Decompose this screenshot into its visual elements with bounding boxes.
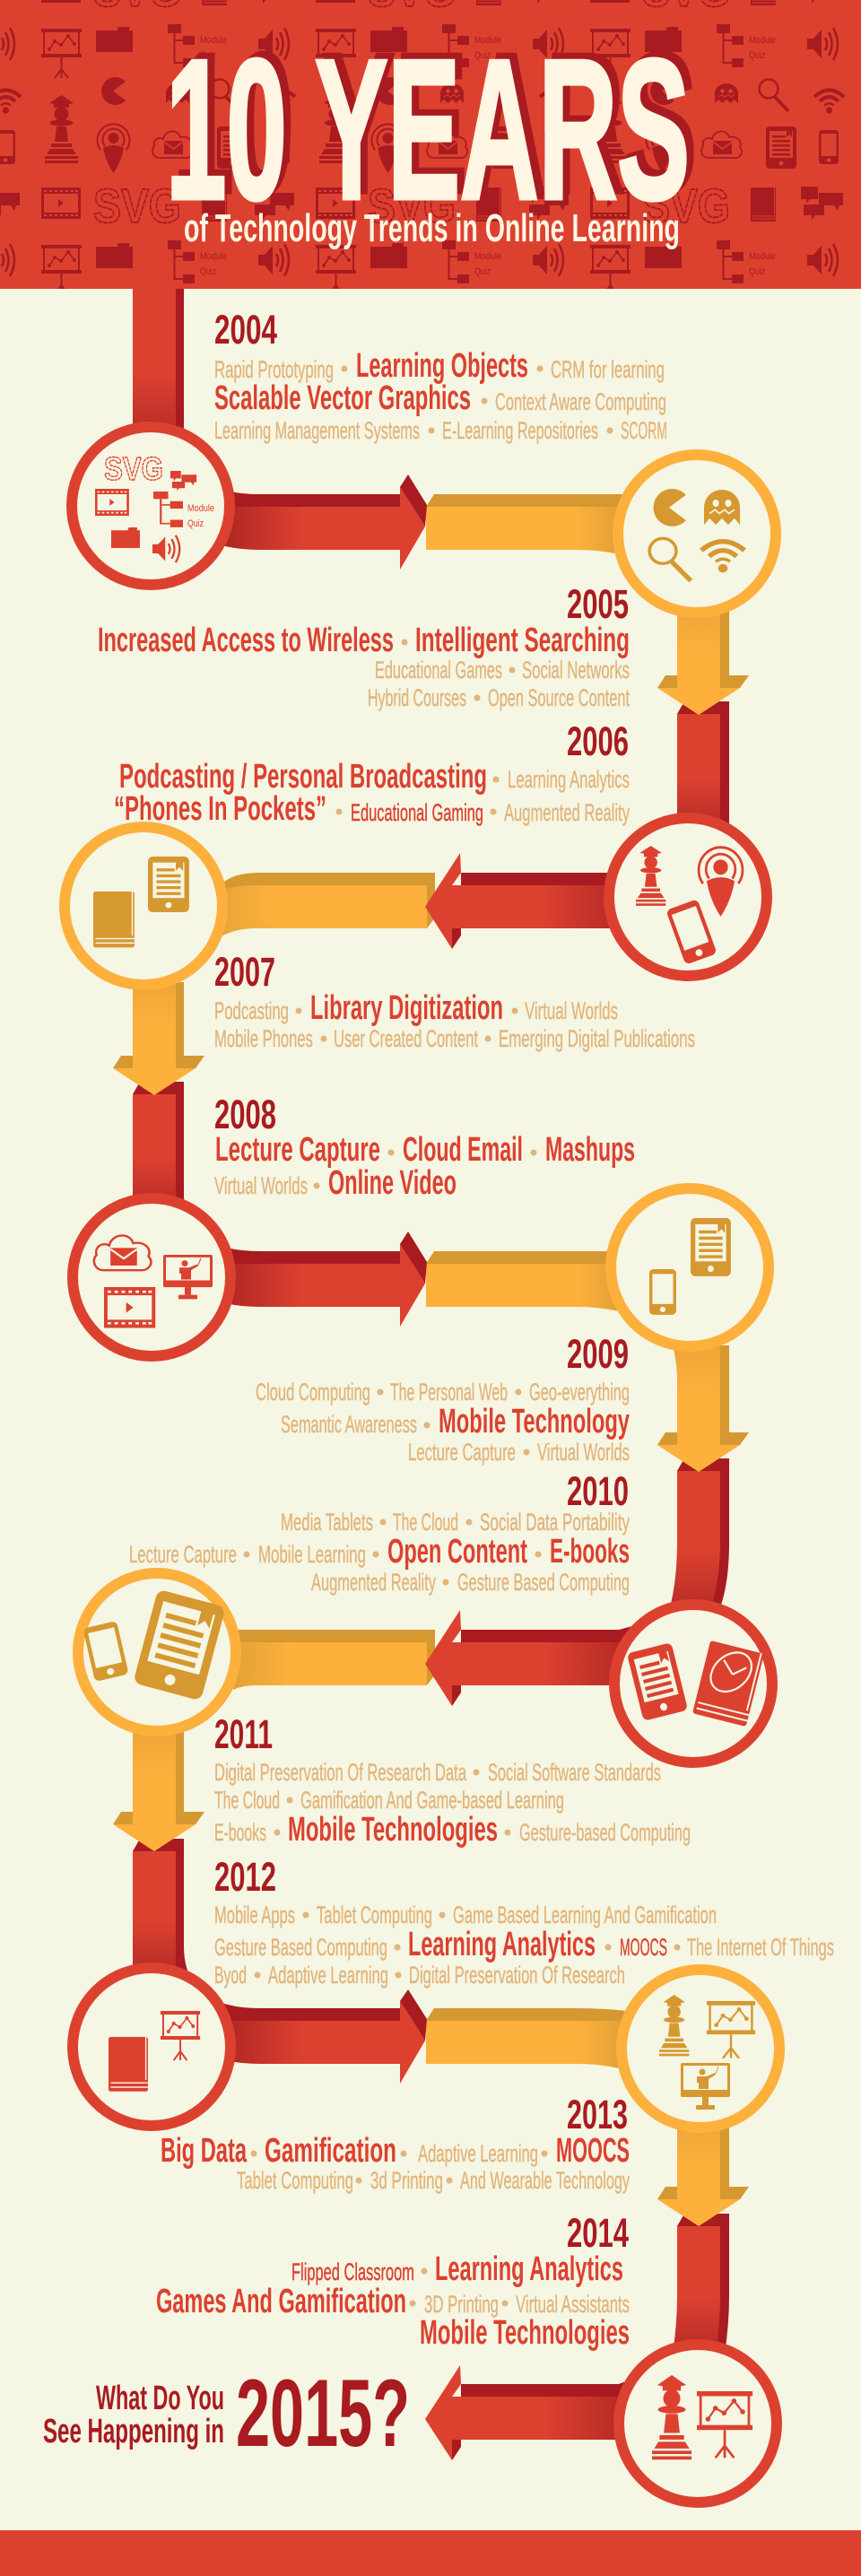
text block: 2013: Adaptive Learning — [418, 2140, 538, 2167]
text block: 2012: Learning Analytics — [408, 1926, 596, 1963]
text block: 2005: Open Source Content — [488, 684, 630, 711]
text block: 2009 — [256, 1331, 630, 1466]
circle 2008: cloud email, lecture monitor, film icons — [73, 1198, 230, 1356]
stem arrow: yellow 2005 to 2006 — [657, 610, 749, 715]
text block: 2004: E-Learning Repositories — [442, 417, 598, 444]
stem: red 2009 to 2010 — [668, 1458, 729, 1614]
icon pattern: Module — [749, 251, 776, 262]
icon pattern: Quiz — [474, 50, 491, 61]
icon pattern — [0, 0, 844, 438]
text block: 2010: Mobile Learning — [258, 1541, 366, 1568]
text block: 2011: The Cloud — [214, 1787, 280, 1814]
text block: 2007: Emerging Digital Publications — [499, 1025, 695, 1052]
icon pattern: Quiz — [749, 50, 765, 61]
stem: red 2004 entry — [133, 289, 400, 507]
text block: 2014: Games And Gamification — [156, 2283, 406, 2320]
text block: 2012: Tablet Computing — [317, 1902, 432, 1928]
text block: 2012: Gesture Based Computing — [214, 1934, 387, 1961]
text block: 2013: And Wearable Technology — [460, 2167, 630, 2194]
icon pattern: Module — [749, 35, 776, 46]
arrow: 2004 to 2005 yellow tail — [426, 494, 628, 555]
icon pattern: Quiz — [474, 266, 491, 277]
circle 2004: SVG, media and module icons: SVG — [104, 450, 163, 487]
text block: 2007: Mobile Phones — [214, 1025, 313, 1052]
text block: 2014: Mobile Technologies — [420, 2314, 630, 2352]
text block: 2011: Mobile Technologies — [288, 1811, 498, 1849]
closing question: 2015 — [43, 2359, 410, 2467]
stem arrow: yellow 2007 to 2008 — [113, 982, 204, 1095]
icon pattern: Quiz — [200, 50, 216, 61]
arrow: 2010 to 2011 yellow tail — [233, 1630, 435, 1690]
text block: 2008: Virtual Worlds — [214, 1172, 308, 1199]
stem: red 2011 to 2012 — [133, 1839, 400, 2021]
text block: 2010: Gesture Based Computing — [457, 1569, 630, 1596]
text block: 2010: E-books — [550, 1533, 630, 1571]
text block: 2012: 2012 — [214, 1854, 276, 1900]
arrow: 2012 to 2013 red head — [179, 1989, 427, 2084]
text block: 2011: Gamification And Game-based Learning — [300, 1787, 564, 1814]
text block: 2011: Social Software Standards — [488, 1759, 661, 1786]
text block: 2007: Podcasting — [214, 997, 289, 1024]
arrow: 2006 to 2007 red head — [425, 853, 622, 949]
arrow: 2008 to 2009 red head — [179, 1231, 427, 1327]
text block: 2011: Digital Preservation Of Research Data — [214, 1759, 467, 1786]
circle 2004: SVG, media and module icons — [72, 427, 230, 585]
text block: 2008: Online Video — [328, 1164, 457, 1202]
text block: 2007: User Created Content — [334, 1025, 478, 1052]
text block: 2006: Podcasting / Personal Broadcasting — [119, 758, 487, 796]
ribbon path: all stems and arrows — [113, 289, 749, 2460]
icon pattern: Module — [200, 35, 227, 46]
circle 2014: pawn and board icons — [619, 2345, 777, 2502]
text block: 2007: Library Digitization — [310, 989, 503, 1027]
text block: 2012: MOOCS — [620, 1934, 667, 1961]
text block: 2005: Hybrid Courses — [368, 684, 466, 711]
text block: 2007 — [214, 949, 695, 1052]
stem: red 2013 to 2014 — [673, 2214, 729, 2354]
text block: 2005: Increased Access to Wireless — [98, 622, 394, 659]
text block: 2010: 2010 — [567, 1468, 629, 1514]
text block: 2006 — [114, 718, 630, 828]
text block: 2014: 3D Printing — [424, 2291, 499, 2318]
text block: 2013: Tablet Computing — [237, 2167, 353, 2194]
header banner — [0, 0, 861, 289]
text block: 2011: Gesture-based Computing — [519, 1819, 691, 1846]
stem arrow: yellow 2009 to 2010 — [657, 1345, 749, 1472]
text block: 2005 — [98, 581, 630, 711]
text block: 2013: 3d Printing — [370, 2167, 443, 2194]
text block: 2010: Media Tablets — [281, 1509, 373, 1536]
text block: 2005: Social Networks — [522, 657, 630, 683]
text block: 2004: CRM for learning — [551, 356, 665, 383]
text block: 2006: Learning Analytics — [508, 766, 630, 793]
text block: 2004: Context Aware Computing — [495, 388, 666, 415]
text block: 2010: The Cloud — [393, 1509, 458, 1536]
text block: 2004: Learning Management Systems — [214, 417, 420, 444]
text block: 2012: Digital Preservation Of Research — [409, 1962, 625, 1989]
circle 2007: ebook and book icons — [65, 827, 222, 985]
text block: 2014: 2014 — [567, 2210, 629, 2256]
circle 2009: ebook and phone icons — [611, 1188, 769, 1346]
circle 2010: ebook and mouse on book icons — [614, 1605, 772, 1762]
text block: 2007: 2007 — [214, 949, 275, 995]
text block: 2011: E-books — [214, 1819, 266, 1846]
icon pattern: Quiz — [749, 266, 765, 277]
circle 2004: SVG, media and module icons: Quiz — [187, 518, 204, 529]
text block: 2012 — [214, 1854, 834, 1989]
text block: 2011: 2011 — [214, 1711, 273, 1757]
text block: 2004: Rapid Prototyping — [214, 356, 334, 383]
text block: 2006: Educational Gaming — [351, 799, 483, 826]
text block: 2004: 2004 — [214, 307, 277, 352]
icon pattern: SVG — [368, 179, 456, 233]
icon pattern: Module — [474, 251, 501, 262]
text block: 2007: Virtual Worlds — [525, 997, 618, 1024]
circle 2011: phone and tablet icons — [78, 1573, 236, 1731]
text block: 2009: Geo-everything — [529, 1379, 630, 1405]
arrow: 2014 to 2015 red — [425, 2365, 628, 2460]
icon pattern: Module — [474, 35, 501, 46]
text block: 2005: Intelligent Searching — [415, 622, 630, 659]
text block: 2014: Learning Analytics — [435, 2250, 623, 2288]
text block: 2009: Virtual Worlds — [537, 1439, 630, 1466]
text block: 2010 — [129, 1468, 630, 1596]
text block: 2009: Cloud Computing — [256, 1379, 370, 1405]
text block: 2005: Educational Games — [375, 657, 502, 683]
arrow: 2012 to 2013 yellow tail — [426, 2008, 632, 2070]
arrow: 2004 to 2005 red head — [179, 474, 427, 570]
stem: red 2007 to 2008 — [133, 1082, 400, 1264]
text block: 2010: Augmented Reality — [311, 1569, 436, 1596]
stem arrow: yellow 2011 to 2012 — [113, 1731, 204, 1851]
arrow: 2008 to 2009 yellow tail — [426, 1251, 628, 1312]
text block: 2008: Lecture Capture — [215, 1131, 380, 1169]
text block: 2014: Flipped Classroom — [291, 2258, 414, 2285]
text block: 2013 — [161, 2092, 630, 2194]
text block: 2006: Augmented Reality — [504, 799, 630, 826]
text block: 2012: Mobile Apps — [214, 1902, 295, 1928]
text block: 2013: Gamification — [265, 2132, 396, 2170]
closing question: 2015: See Happening in — [43, 2413, 224, 2450]
text block: 2013: Big Data — [161, 2132, 248, 2170]
circle 2012: book and presentation board icons — [73, 1968, 230, 2126]
text block: 2004 — [214, 307, 667, 444]
arrow: 2010 to 2011 red head — [425, 1610, 632, 1706]
text block: 2009: The Personal Web — [390, 1379, 508, 1405]
text block: 2009: 2009 — [567, 1331, 629, 1377]
text block: 2009: Mobile Technology — [439, 1403, 630, 1440]
text block: 2008: Cloud Email — [403, 1131, 523, 1169]
stem arrow: yellow 2013 to 2014 — [657, 2126, 749, 2226]
text block: 2008 — [214, 1092, 635, 1202]
circle 2013: pawn, board, monitor icons — [622, 1970, 779, 2128]
text block: 2013: 2013 — [567, 2092, 628, 2137]
icon pattern: SVG — [93, 179, 181, 233]
text block: 2006: “Phones In Pockets” — [114, 790, 326, 828]
icon pattern: Quiz — [200, 266, 216, 277]
text block: 2013: MOOCS — [556, 2132, 630, 2170]
closing question: 2015: What Do You — [96, 2380, 224, 2417]
text block: 2006: 2006 — [567, 718, 629, 764]
text block: 2005: 2005 — [567, 581, 629, 627]
text block: 2010: Open Content — [387, 1533, 527, 1571]
arrow: 2006 to 2007 yellow tail — [206, 873, 435, 937]
icon pattern: Module — [200, 251, 227, 262]
closing question: 2015: 2015? — [236, 2359, 410, 2467]
text block: 2004: Scalable Vector Graphics — [214, 379, 471, 417]
text block: 2011 — [214, 1711, 691, 1849]
text block: 2008: Mashups — [545, 1131, 635, 1169]
circle 2004: SVG, media and module icons: Module — [187, 503, 214, 514]
text block: 2008: 2008 — [214, 1092, 276, 1137]
stem: red 2005 to 2006 — [677, 701, 729, 831]
text block: 2012: Adaptive Learning — [268, 1962, 388, 1989]
text block: 2010: Lecture Capture — [129, 1541, 237, 1568]
text block: 2009: Lecture Capture — [408, 1439, 516, 1466]
text block: 2009: Semantic Awareness — [281, 1411, 417, 1438]
circle 2005: pacman, ghost, search, wifi icons — [618, 455, 776, 613]
circle 2006: chess pawn, podcast, phone icons — [609, 818, 767, 976]
text block: 2004: SCORM — [621, 417, 667, 444]
text block: 2012: Byod — [214, 1962, 247, 1989]
text block: 2010: Social Data Portability — [480, 1509, 630, 1536]
text block: 2014: Virtual Assistants — [516, 2291, 630, 2318]
text block: 2004: Learning Objects — [356, 347, 528, 385]
footer bar — [0, 2530, 861, 2576]
icon pattern: SVG — [642, 179, 730, 233]
text block: 2014 — [156, 2210, 630, 2352]
